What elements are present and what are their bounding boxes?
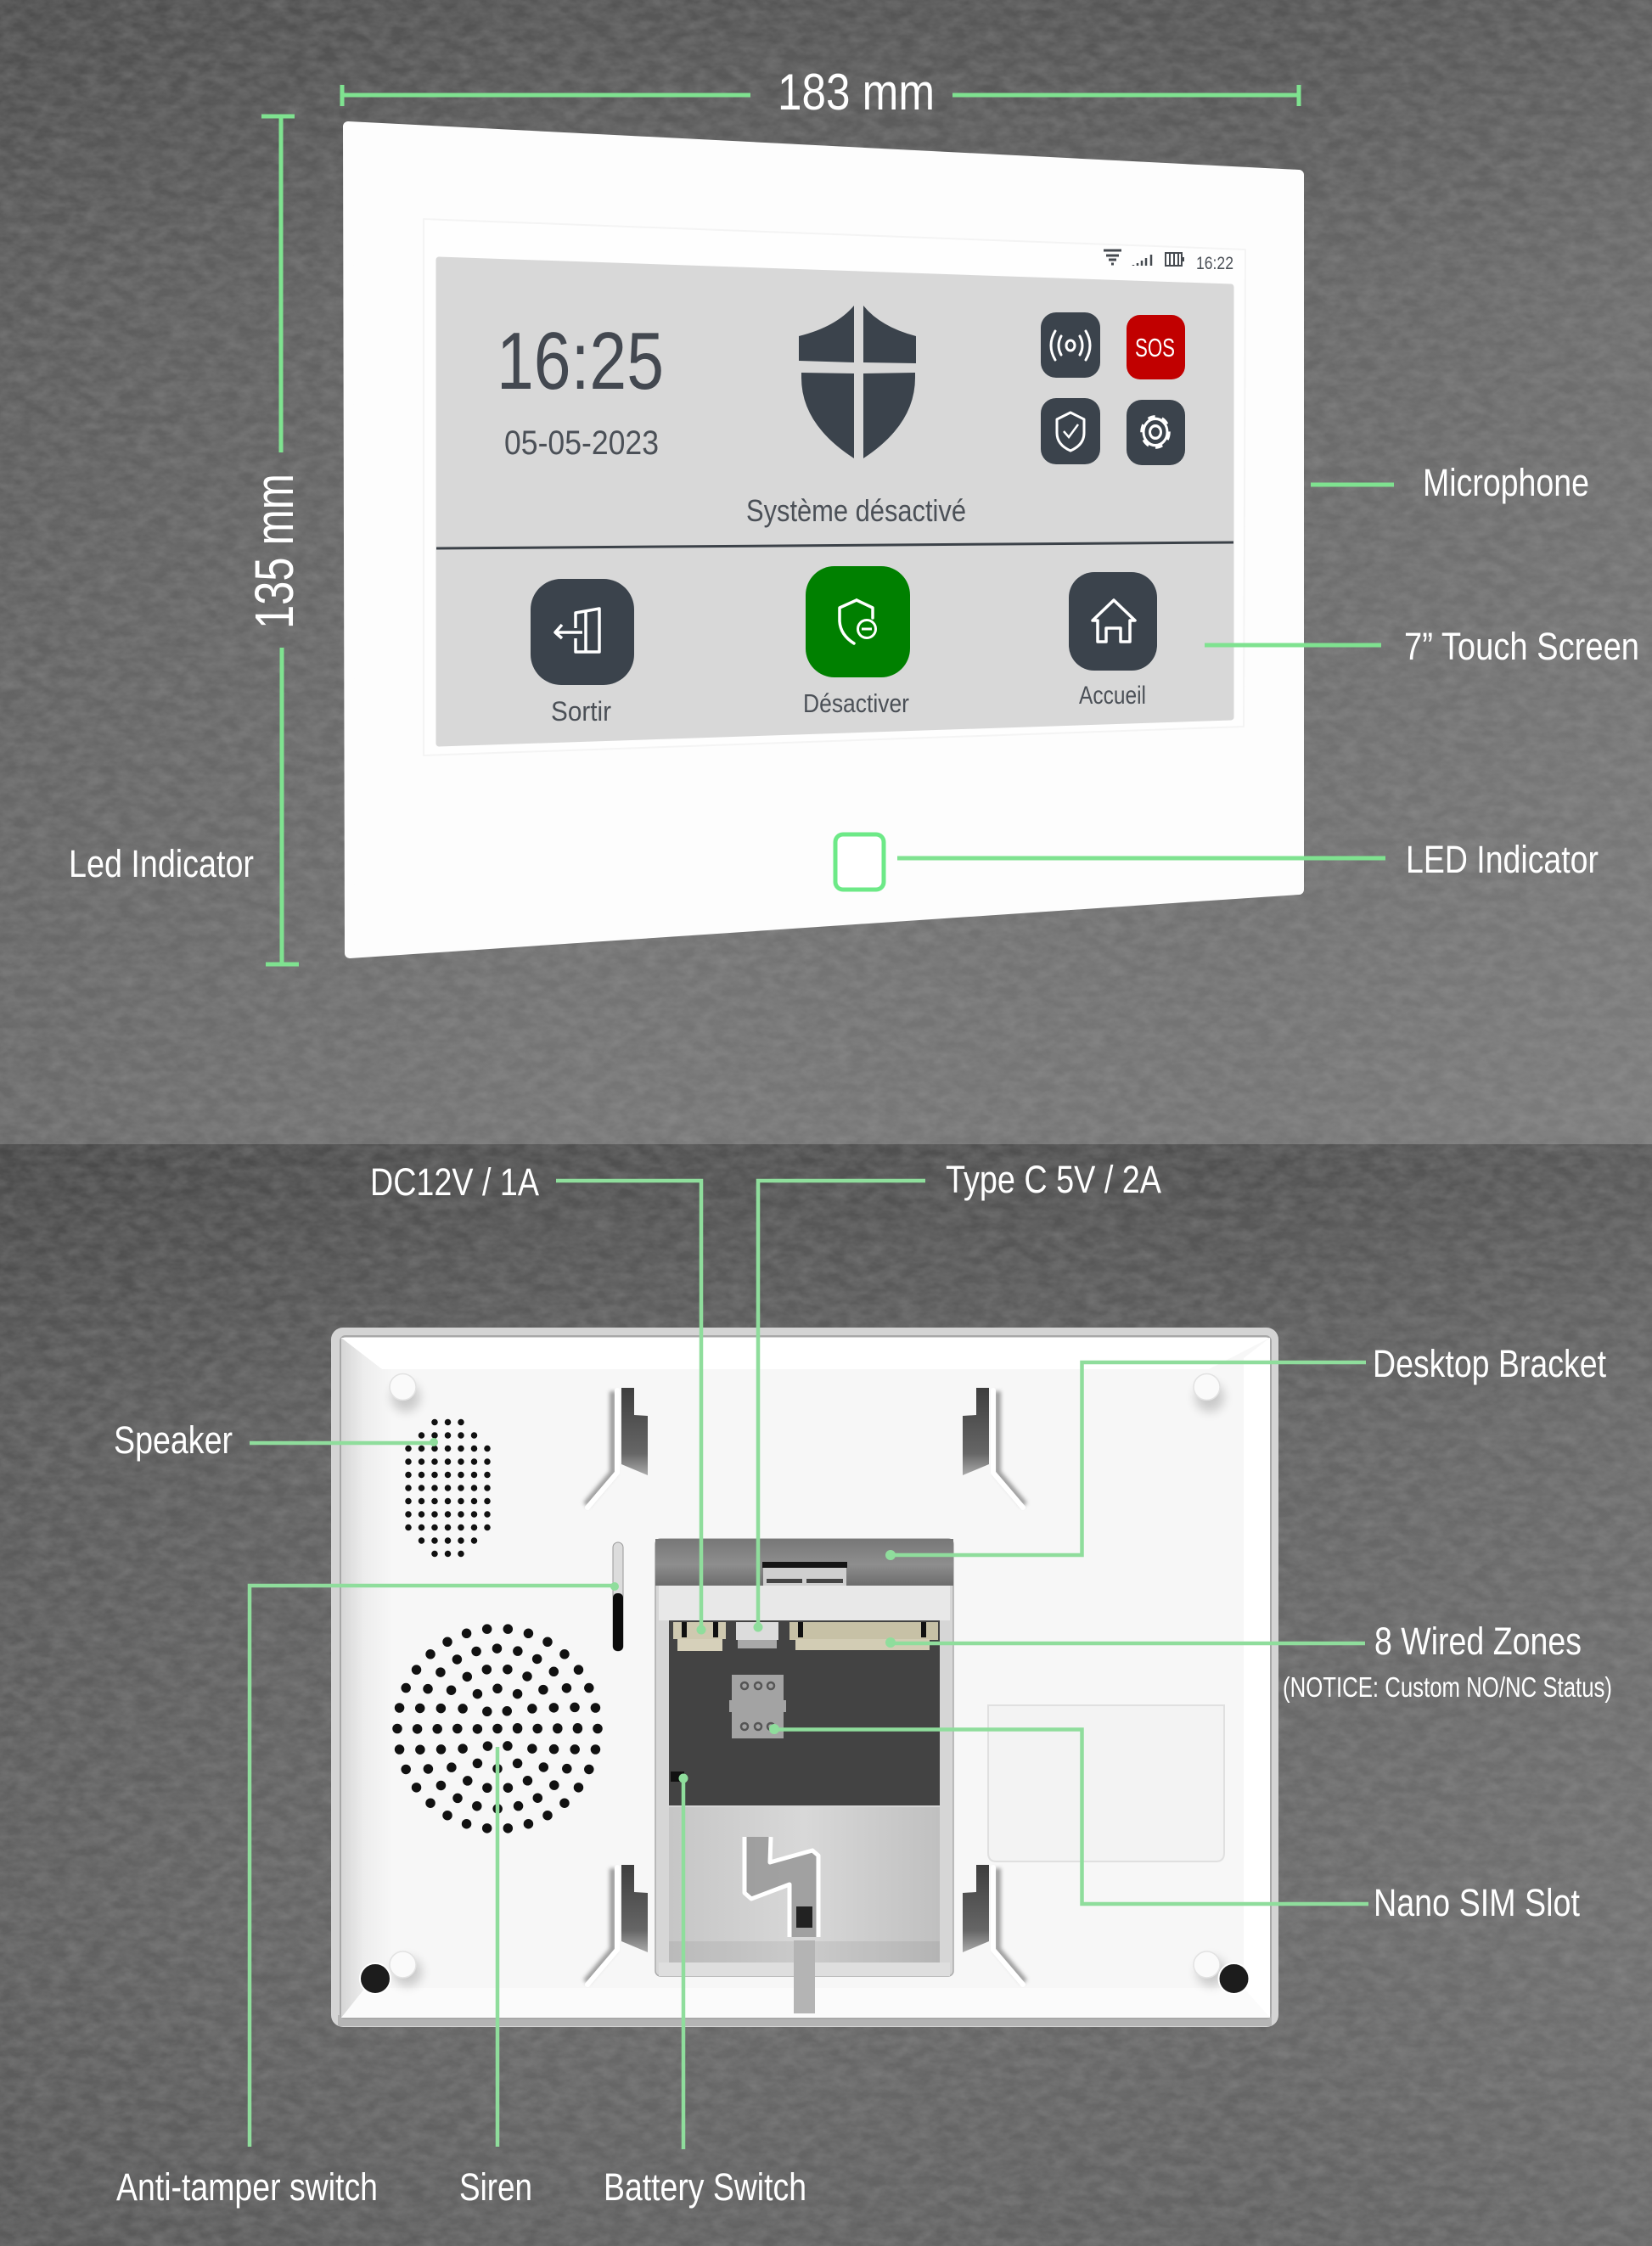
status bar icons <box>1104 250 1233 273</box>
width dimension: 183 mm: 183 mm <box>778 64 935 121</box>
circuit board <box>669 1620 940 1805</box>
battery bay <box>669 1807 940 1962</box>
speaker grille: siren <box>397 1628 598 1828</box>
leader: desktop bracket <box>885 1362 1366 1560</box>
label: battery switch: Battery Switch <box>604 2165 806 2209</box>
connector: DC power <box>673 1622 726 1651</box>
connector: USB type C <box>736 1622 778 1648</box>
compartment walls <box>655 1539 953 1976</box>
screws <box>360 1963 1250 1994</box>
SIM card slot <box>729 1675 786 1738</box>
leader: DC power <box>556 1181 706 1635</box>
label: siren: Siren <box>459 2165 532 2209</box>
label: desktop bracket: Desktop Bracket <box>1373 1342 1606 1385</box>
button: Désactiver <box>803 566 910 718</box>
label: type C: Type C 5V / 2A <box>946 1158 1161 1201</box>
label: wired zones: 8 Wired Zones <box>1374 1620 1582 1663</box>
height dimension: 135 mm <box>244 116 305 964</box>
leader: speaker <box>250 1438 438 1446</box>
leader: battery switch <box>679 1774 688 2149</box>
label: DC power: DC12V / 1A <box>370 1160 539 1204</box>
button: wireless <box>1041 312 1100 378</box>
leader: anti-tamper <box>250 1582 619 2147</box>
LED indicator ring <box>835 834 884 890</box>
leader: wired zones <box>885 1637 1365 1648</box>
button: SOS: SOS <box>1135 333 1175 362</box>
button: Accueil: Accueil <box>1079 682 1146 710</box>
button: Sortir: Sortir <box>551 696 611 727</box>
panel: front of alarm console <box>348 126 1299 953</box>
status text: Système désactivé <box>746 493 966 528</box>
button: Accueil <box>1069 572 1157 710</box>
clock time: 16:25 <box>497 316 664 407</box>
button: Désactiver: Désactiver <box>803 688 909 718</box>
width dimension: 183 mm <box>342 64 1299 121</box>
speaker grille: small <box>408 1423 489 1553</box>
panel: back of alarm console <box>331 1328 1278 2027</box>
upper recess <box>655 1539 953 1586</box>
button: shield check <box>1041 398 1100 464</box>
screen bezel <box>424 219 1245 755</box>
screw posts <box>390 1373 1220 1978</box>
button: Sortir <box>531 579 634 727</box>
leader: siren <box>496 1747 499 2147</box>
height dimension: 135 mm: 135 mm <box>244 474 305 629</box>
leader: touch screen <box>1205 643 1381 647</box>
leader: type C <box>754 1181 925 1631</box>
button: SOS <box>1127 315 1185 379</box>
date: 05-05-2023 <box>504 424 659 462</box>
leader: LED indicator <box>897 856 1385 861</box>
battery switch <box>671 1772 684 1782</box>
touch screen surface <box>439 260 1231 744</box>
anti-tamper slot <box>613 1542 623 1651</box>
leader: nano SIM <box>769 1724 1368 1904</box>
label: LED indicator right: LED Indicator <box>1406 838 1599 881</box>
label recess <box>988 1705 1224 1861</box>
screen divider <box>436 542 1233 548</box>
icon: status shield <box>799 306 916 458</box>
label: speaker: Speaker <box>114 1418 233 1462</box>
label: Led indicator left: Led Indicator <box>69 842 254 885</box>
label: nano SIM: Nano SIM Slot <box>1374 1881 1580 1924</box>
casing back face <box>341 1338 1270 2018</box>
background: upper panel <box>0 0 1652 1144</box>
lower sill <box>659 1962 950 1976</box>
button: settings gear <box>1127 400 1185 465</box>
light ledge <box>659 1586 950 1620</box>
label: anti-tamper: Anti-tamper switch <box>116 2165 378 2209</box>
desktop bracket clip <box>762 1562 847 1586</box>
cable <box>794 1940 815 2013</box>
label: Microphone: Microphone <box>1423 461 1589 504</box>
leader: Microphone <box>1311 482 1394 487</box>
casing rim <box>331 1328 1278 2027</box>
cable clip <box>745 1837 818 1937</box>
battery compartment <box>655 1539 953 2013</box>
connector: wired zones terminal <box>789 1622 938 1650</box>
status bar icons: 16:22 <box>1196 254 1233 273</box>
screw post shadows <box>391 1383 1226 1986</box>
wall mount hooks <box>586 1388 1025 1985</box>
background: lower panel <box>0 1144 1652 2246</box>
console body <box>348 126 1299 953</box>
